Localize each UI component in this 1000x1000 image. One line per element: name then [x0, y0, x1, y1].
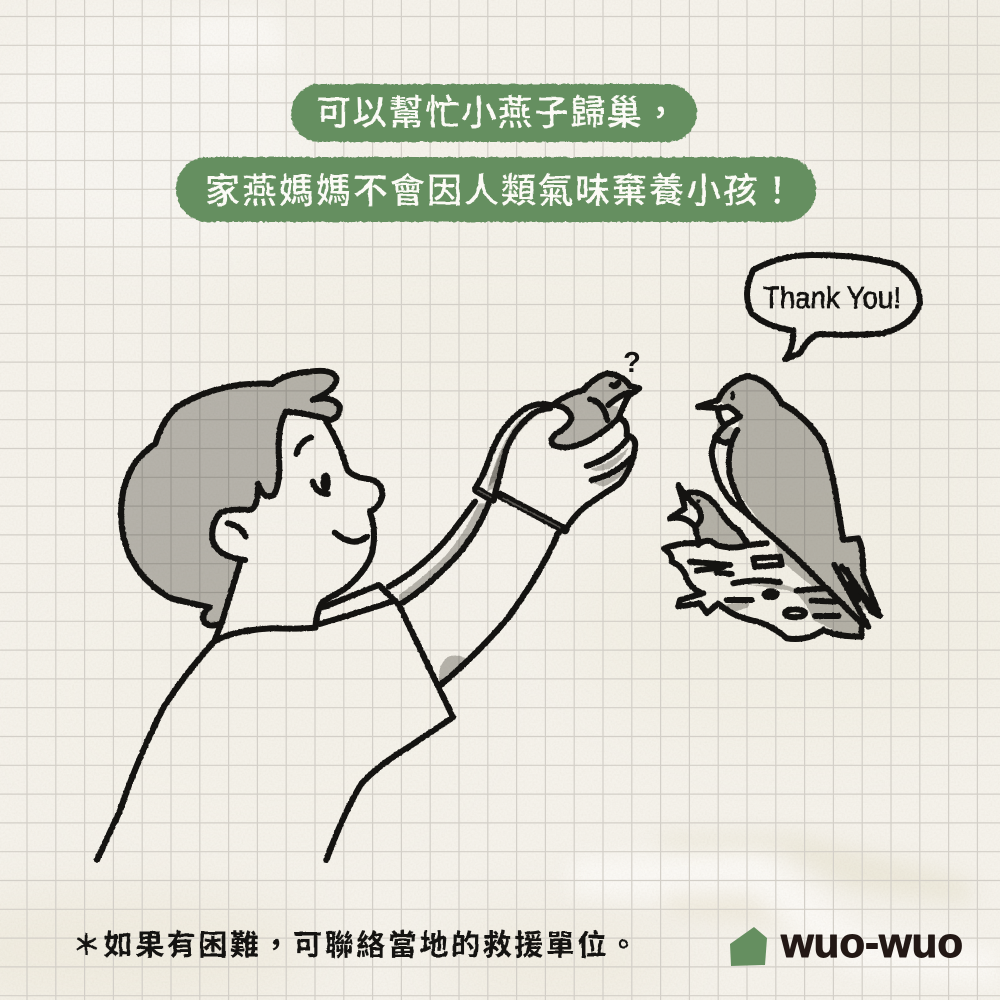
swallow grey fills [688, 376, 877, 637]
speech bubble: Thank You! [763, 280, 901, 315]
eyebrow [297, 437, 311, 454]
swallow ink [664, 376, 880, 639]
person ink outline [97, 371, 558, 860]
icon: house [730, 927, 767, 966]
watch band [477, 490, 565, 530]
chick [670, 485, 748, 545]
nest outline [664, 541, 862, 639]
person grey fills [121, 371, 546, 683]
lower beak [608, 392, 629, 405]
heading: green banner line 1: 可以幫忙小燕子歸巢， [316, 94, 678, 133]
eye lid [313, 482, 328, 494]
back of body [97, 642, 214, 860]
speech bubble [747, 255, 920, 359]
thumb back line [475, 404, 550, 488]
question mark: ? [623, 347, 641, 379]
swallow chest and belly [712, 426, 863, 625]
tail feathers [834, 565, 880, 627]
swallow belly inner line [729, 430, 750, 517]
arm upper line [389, 502, 475, 587]
logo wordmark: wuo-wuo [780, 919, 963, 966]
face outline [315, 422, 382, 627]
finger lines [587, 440, 631, 480]
chick and hand ink [475, 373, 639, 530]
wing line [590, 399, 607, 420]
collar [320, 585, 399, 624]
thumb and palm [550, 405, 635, 530]
swallow back [698, 376, 880, 616]
nest details [690, 562, 838, 616]
chest feather [715, 437, 728, 443]
thumb inner line [495, 408, 550, 493]
chick eye [696, 499, 700, 503]
chick eye [612, 383, 618, 386]
lower arm [441, 533, 558, 685]
ear inner line [228, 523, 246, 537]
footnote: ＊如果有困難，可聯絡當地的救援單位。 [72, 929, 638, 962]
swallow eye [730, 391, 735, 401]
hair outline [121, 371, 340, 625]
swallow throat [698, 407, 740, 425]
arm inner line [399, 502, 489, 605]
smile [335, 533, 367, 542]
nest marks [753, 557, 782, 567]
chick head and beak [555, 373, 639, 418]
heading: green banner line 2 [176, 157, 816, 222]
heading: green banner line 2: 家燕媽媽不會因人類氣味棄養小孩！ [205, 172, 795, 211]
neckline [214, 623, 315, 642]
illustration: swallow family on nest [664, 376, 880, 639]
heading: green banner line 1 [291, 84, 697, 142]
chick in hand grey fills [488, 373, 630, 487]
logo: wuo-wuo [730, 919, 963, 966]
illustration: person holding chick [97, 347, 641, 860]
eye [321, 472, 331, 492]
sleeve [326, 605, 453, 860]
